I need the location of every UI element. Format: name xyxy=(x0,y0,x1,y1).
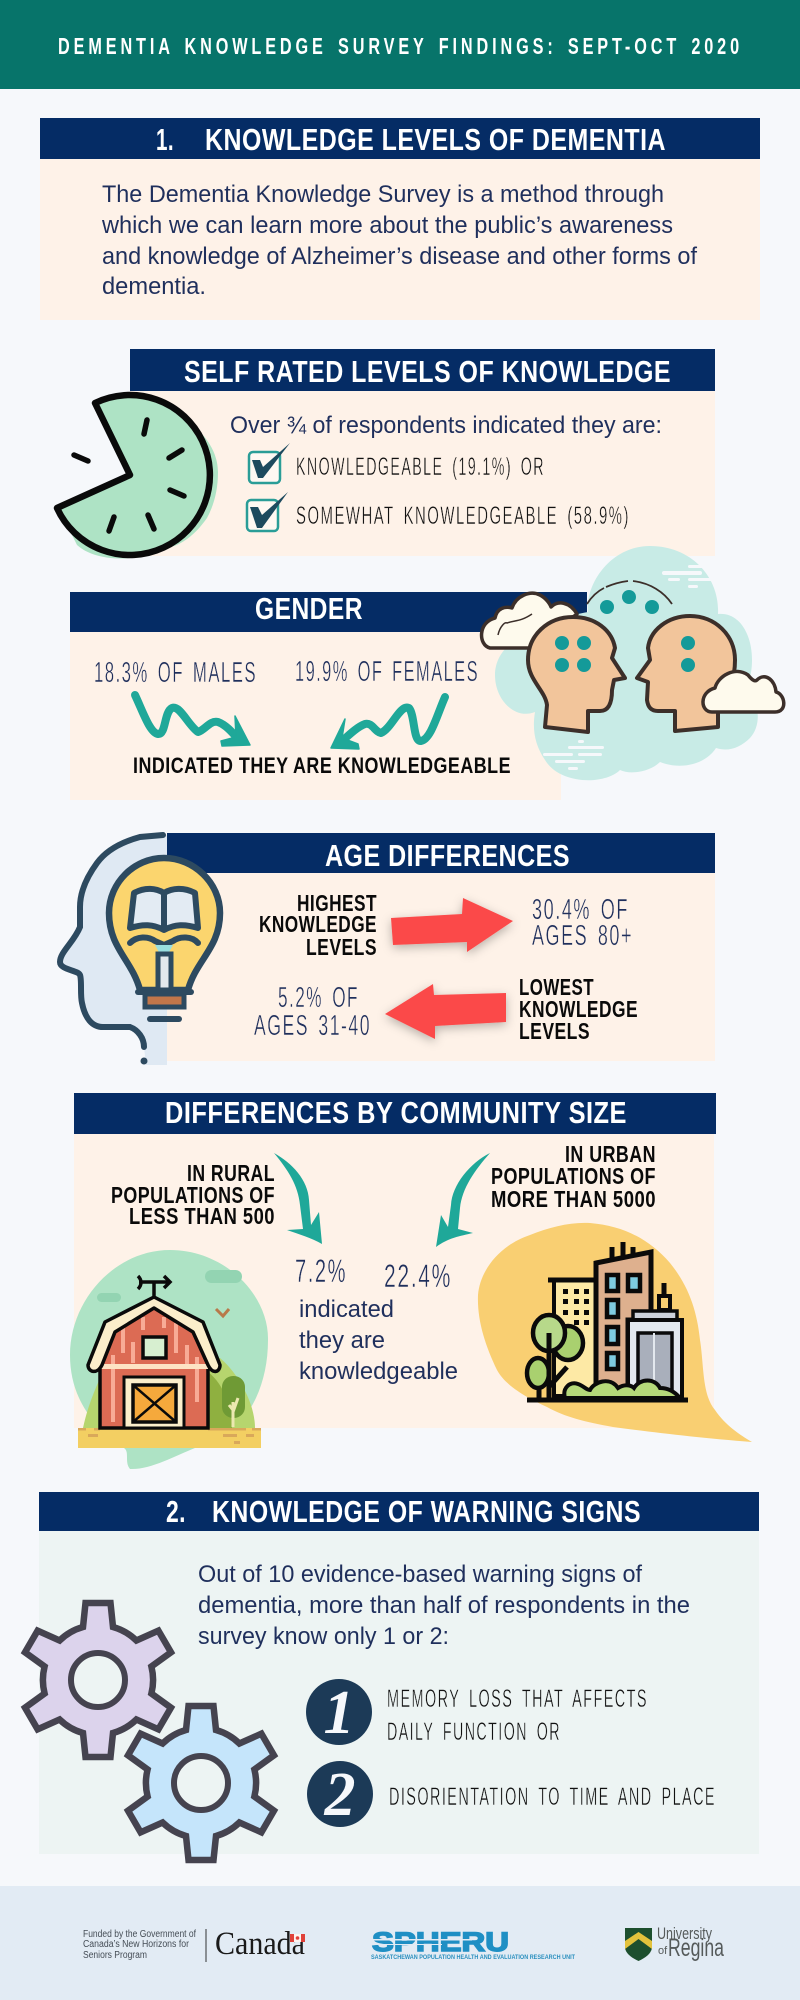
icon: head with light bulb and book xyxy=(60,835,220,1065)
text: knowledgeable: KNOWLEDGEABLE (19.1%) OR xyxy=(296,453,545,481)
text: rural populations: LESS THAN 500 xyxy=(129,1203,275,1229)
panel: knowledge levels of dementia xyxy=(40,118,760,320)
icon: blue gear xyxy=(128,1706,274,1860)
icon: checkbox 1 xyxy=(249,443,290,483)
arrow: squiggle to the left xyxy=(331,697,445,749)
text: lowest knowledge levels: LEVELS xyxy=(519,1018,590,1044)
panel: age differences xyxy=(60,833,715,1065)
text: lowest knowledge levels xyxy=(519,974,638,1044)
badge: number 1 xyxy=(306,1679,372,1747)
text: 7.2%: 7.2% xyxy=(295,1253,347,1289)
text: highest knowledge levels: KNOWLEDGE xyxy=(259,911,377,937)
panel: differences by community size xyxy=(70,1093,752,1469)
text: warning signs intro: dementia, more than half of respondents in the xyxy=(198,1592,690,1619)
text: warning signs intro: Out of 10 evidence-based warning signs of xyxy=(198,1561,642,1588)
arrow: red right xyxy=(391,898,513,952)
text: 22.4%: 22.4% xyxy=(384,1258,452,1294)
text: rural populations xyxy=(111,1160,275,1229)
logo: SPHERU: SASKATCHEWAN POPULATION HEALTH AND EVALUATION RESEARCH UNIT xyxy=(371,1954,575,1961)
text: indicated they are knowledgeable: INDICATED THEY ARE KNOWLEDGEABLE xyxy=(133,753,511,778)
text: males: 18.3% OF MALES xyxy=(94,657,257,689)
panel: self rated levels of knowledge xyxy=(57,349,715,559)
icon: city buildings xyxy=(478,1223,752,1442)
funding text: Seniors Program xyxy=(83,1950,147,1961)
badge: number 2: 2 xyxy=(324,1761,356,1829)
intro text block: and knowledge of Alzheimer’s disease and other forms of xyxy=(102,243,697,270)
heading: section 2: 2. xyxy=(166,1494,186,1529)
text: indicated they are knowledgeable: they are xyxy=(299,1327,385,1354)
text: memory loss: DAILY FUNCTION OR xyxy=(387,1718,561,1746)
funding text: Funded by the Government of xyxy=(83,1929,196,1940)
text: rural populations: IN RURAL xyxy=(187,1160,275,1186)
logo: University of Regina: Regina xyxy=(668,1934,724,1962)
heading: age differences: AGE DIFFERENCES xyxy=(325,838,570,873)
icon: barn xyxy=(70,1250,268,1469)
panel: gender xyxy=(70,591,587,800)
text: urban populations: IN URBAN xyxy=(565,1141,656,1167)
text: urban populations xyxy=(491,1141,656,1212)
intro text block: which we can learn more about the public’s awareness xyxy=(101,212,673,239)
text: lowest knowledge levels: LOWEST xyxy=(519,974,594,1000)
text: 30.4% of ages 80+ xyxy=(532,894,633,952)
text: urban populations: MORE THAN 5000 xyxy=(491,1186,656,1212)
text: indicated they are knowledgeable: indicated xyxy=(299,1296,394,1323)
intro text block: dementia. xyxy=(102,273,206,300)
icon: clock pie xyxy=(57,395,218,559)
text: highest knowledge levels: HIGHEST xyxy=(297,890,377,916)
arrow: squiggle to the right xyxy=(135,695,250,746)
text: over three quarters: Over ¾ of respondents indicated they are: xyxy=(230,412,662,439)
logo: University of Regina: University xyxy=(657,1924,712,1943)
logo: SPHERU: SPHERU xyxy=(372,1927,509,1957)
heading: gender: GENDER xyxy=(255,591,363,626)
text: females: 19.9% OF FEMALES xyxy=(295,656,479,688)
text: 5.2% of ages 31-40: 5.2% OF xyxy=(278,982,359,1014)
logo: University of Regina: of xyxy=(658,1945,668,1957)
heading: section 1: 1. xyxy=(156,122,174,157)
logo: University of Regina xyxy=(625,1924,724,1962)
badge: number 1: 1 xyxy=(324,1679,354,1747)
intro text block: The Dementia Knowledge Survey is a method through xyxy=(102,181,664,208)
text: warning signs intro xyxy=(198,1561,690,1650)
heading: section 1: KNOWLEDGE LEVELS OF DEMENTIA xyxy=(205,122,666,157)
icon: checkbox 2 xyxy=(247,492,288,531)
text: indicated they are knowledgeable: knowledgeable xyxy=(299,1358,458,1385)
icon: purple gear xyxy=(25,1603,171,1757)
arrow: urban curve xyxy=(436,1153,490,1247)
text: warning signs intro: survey know only 1 or 2: xyxy=(198,1623,449,1650)
funding text xyxy=(83,1929,196,1961)
text: urban populations: POPULATIONS OF xyxy=(491,1163,656,1189)
arrow: red left xyxy=(385,984,506,1039)
text: 30.4% of ages 80+: AGES 80+ xyxy=(532,920,633,952)
heading: self rated: SELF RATED LEVELS OF KNOWLEDGE xyxy=(184,354,671,389)
funding text: Canada’s New Horizons for xyxy=(83,1939,190,1950)
text: highest knowledge levels: LEVELS xyxy=(306,934,377,960)
logo: Canada wordmark: Canada xyxy=(215,1926,305,1962)
arrow: rural curve xyxy=(274,1153,322,1244)
text: indicated they are knowledgeable xyxy=(299,1296,458,1385)
text: lowest knowledge levels: KNOWLEDGE xyxy=(519,996,638,1022)
panel: knowledge of warning signs xyxy=(25,1492,759,1860)
intro text block xyxy=(101,181,697,300)
text: 5.2% of ages 31-40 xyxy=(254,982,371,1042)
text: 5.2% of ages 31-40: AGES 31-40 xyxy=(254,1010,371,1042)
text: rural populations: POPULATIONS OF xyxy=(111,1182,275,1208)
heading: community size: DIFFERENCES BY COMMUNITY SIZE xyxy=(165,1095,627,1130)
badge: number 2 xyxy=(307,1761,373,1829)
text: 30.4% of ages 80+: 30.4% OF xyxy=(532,894,629,926)
text: highest knowledge levels xyxy=(259,890,377,960)
footer xyxy=(0,1886,800,2000)
header banner xyxy=(0,0,800,89)
heading: section 2: KNOWLEDGE OF WARNING SIGNS xyxy=(212,1494,641,1529)
logo: SPHERU xyxy=(371,1927,575,1961)
icon: two heads with clouds xyxy=(482,546,784,780)
text: memory loss xyxy=(387,1685,648,1746)
